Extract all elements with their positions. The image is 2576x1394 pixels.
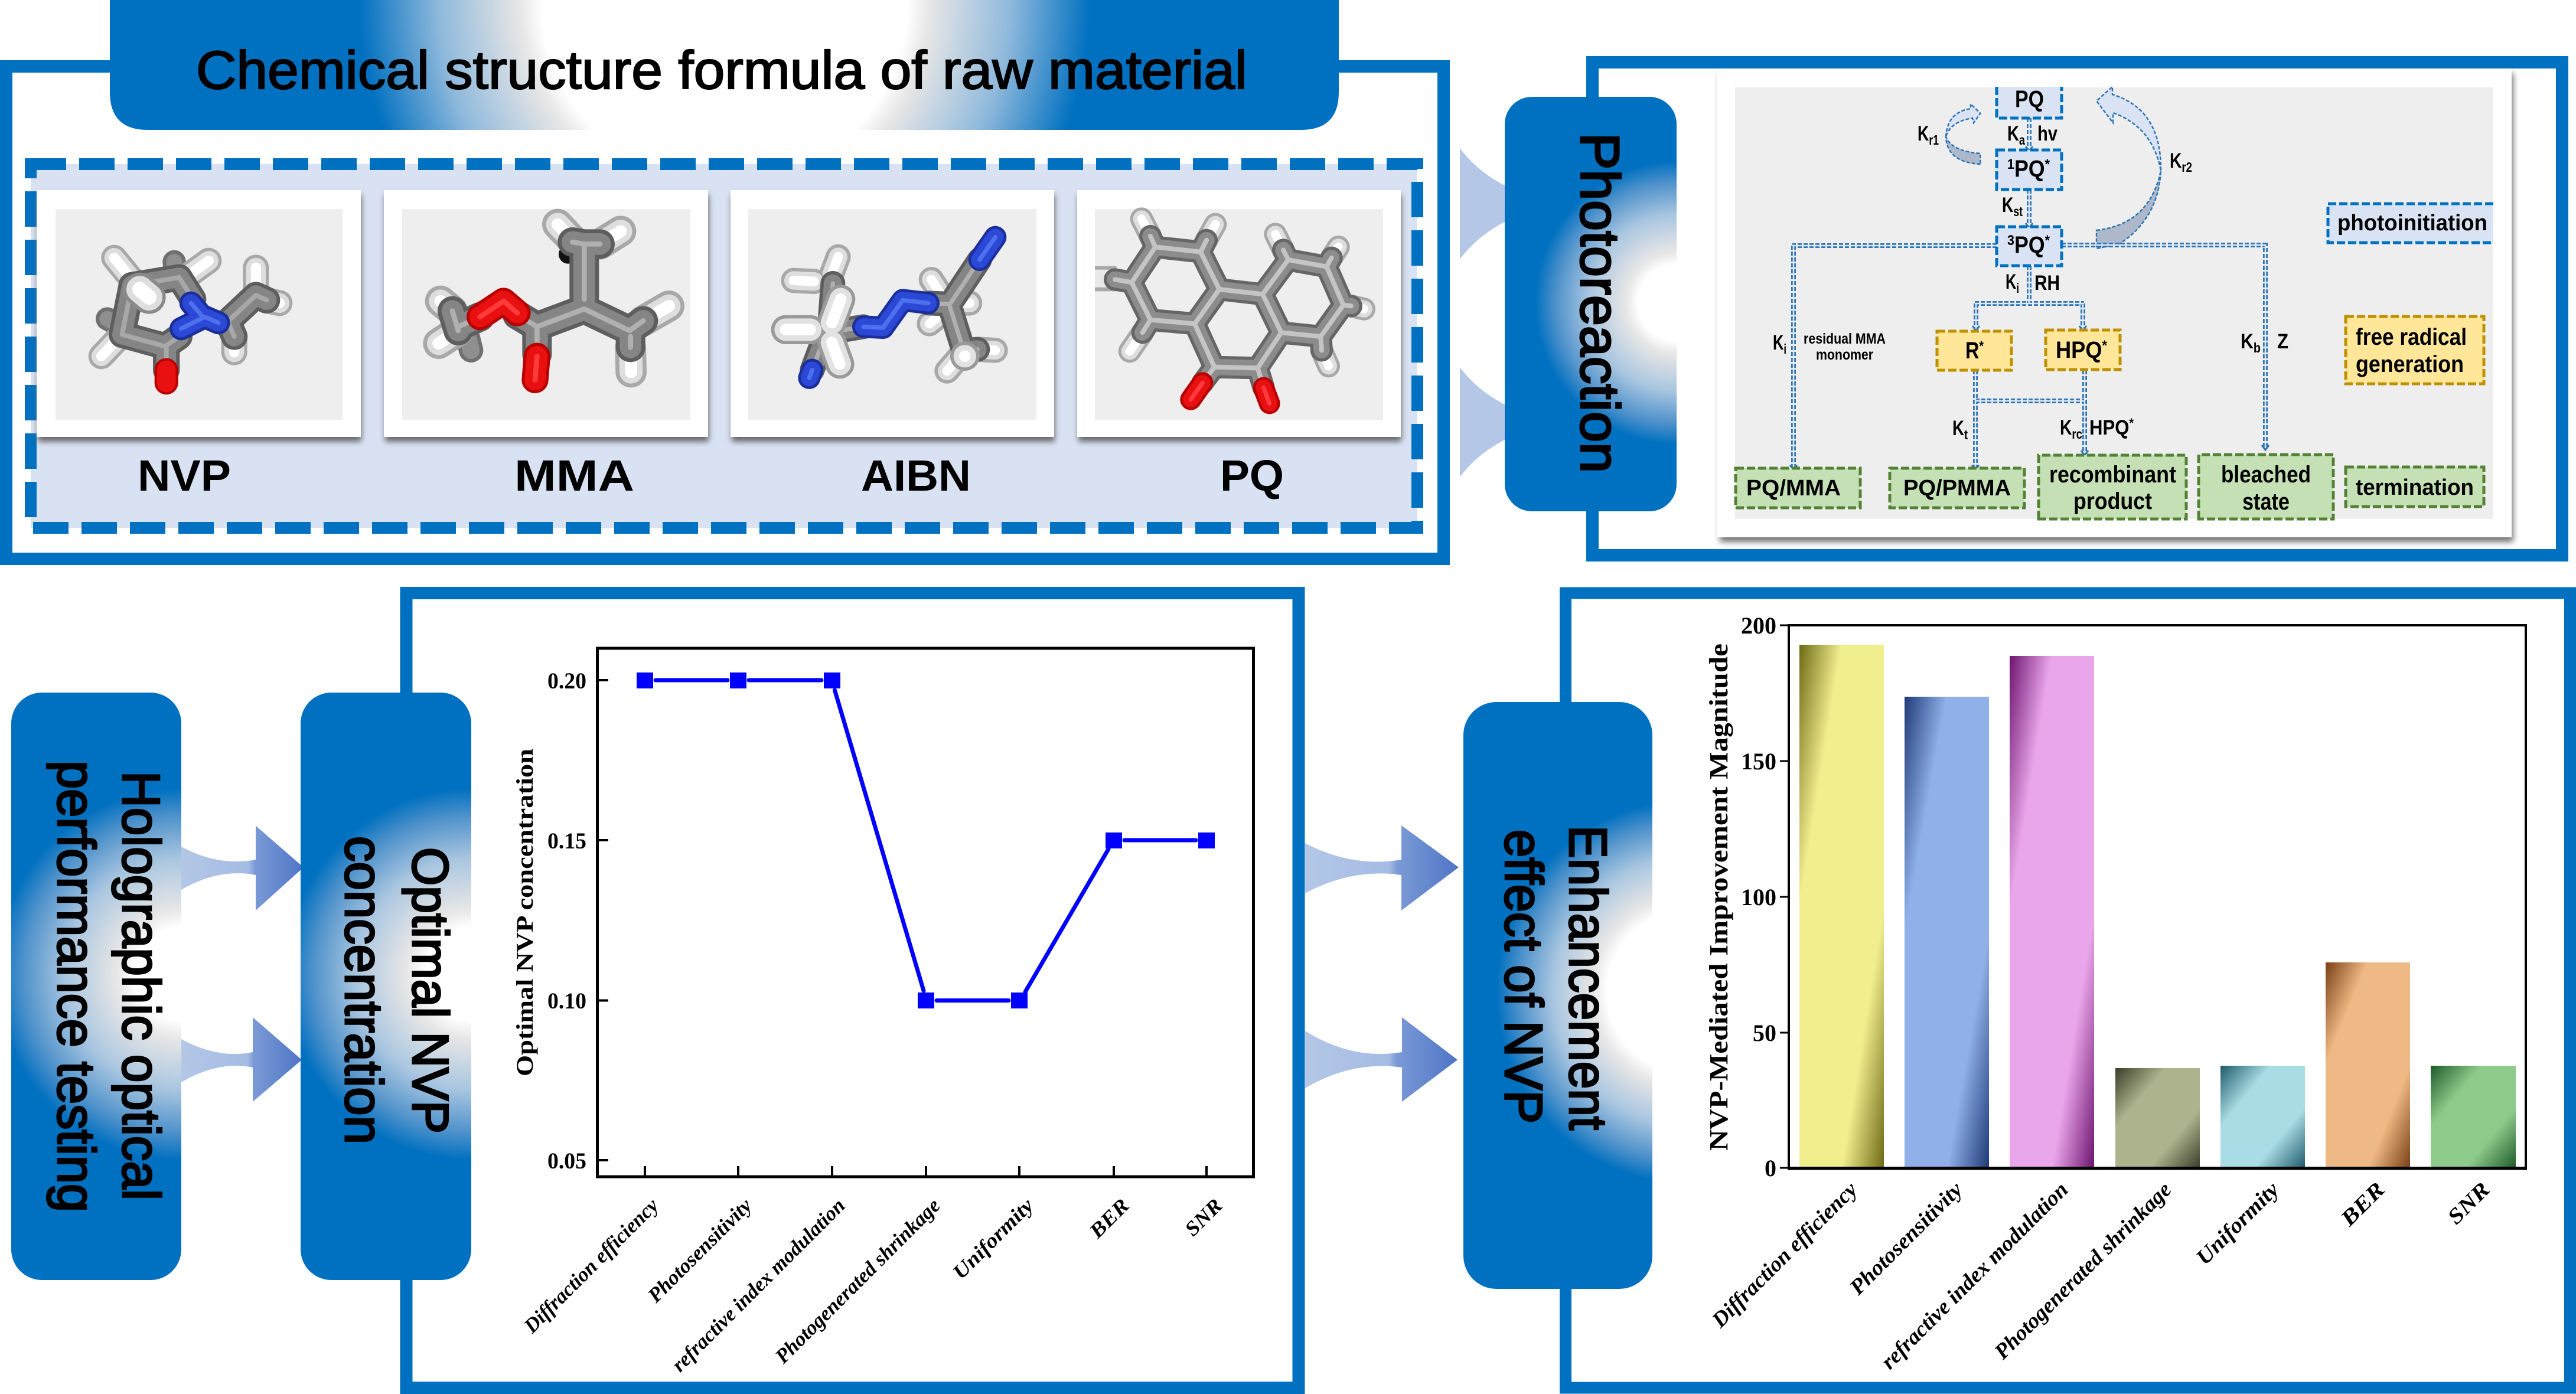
x category labels: Uniformity xyxy=(2192,1177,2284,1270)
y tick labels: 50 xyxy=(1753,1020,1776,1046)
arrow: raw materials to photoreaction (upper) xyxy=(1460,148,1512,259)
title: Chemical structure formula of raw material xyxy=(196,41,1247,100)
panel: chemical structure formula of raw material xyxy=(6,0,1443,559)
label: Ki left: K xyxy=(1773,331,1788,354)
label: Ki: i xyxy=(2016,280,2019,296)
node: PQ: PQ xyxy=(2015,86,2044,112)
y tick labels: 0.10 xyxy=(547,988,586,1014)
x category labels: SNR xyxy=(1180,1194,1227,1240)
x category labels: Diffraction efficiency xyxy=(519,1194,663,1338)
molecule card: PQ xyxy=(1077,190,1401,442)
node: PQ/MMA xyxy=(1736,468,1860,508)
node: PQ/PMMA xyxy=(1890,468,2024,508)
icon: MMA molecule xyxy=(439,224,669,380)
pill: Holographic optical performance testing xyxy=(11,693,181,1280)
molecule card: MMA xyxy=(384,190,709,442)
node: 1PQ*: 1 xyxy=(2007,156,2014,172)
label: Ki left: i xyxy=(1783,341,1786,357)
node: bleached state xyxy=(2199,455,2333,519)
axis ticks xyxy=(596,680,1207,1178)
legend: photoinitiation xyxy=(2328,204,2493,243)
x category labels: Uniformity xyxy=(948,1194,1038,1284)
node: bleached state: state xyxy=(2242,489,2290,515)
pill: Optimal NVP concentration xyxy=(301,693,471,1280)
y tick labels: 0.20 xyxy=(547,668,586,694)
panel: photoreaction diagram xyxy=(1592,63,2562,555)
molecule name: AIBN: AIBN xyxy=(861,451,971,500)
label: Kt: K xyxy=(1952,417,1967,440)
label: Kb: b xyxy=(2254,340,2261,355)
pill: Holographic optical performance testing: performance testing xyxy=(46,760,105,1212)
label: HPQ*: * xyxy=(2129,416,2134,430)
y ticks xyxy=(1780,625,1789,1168)
pill: Photoreaction: Photoreaction xyxy=(1569,133,1631,473)
bars xyxy=(1799,645,2516,1168)
arrow: chart to enhancement (upper) xyxy=(1305,825,1459,910)
diagram card xyxy=(1717,68,2513,542)
label: Kst: K xyxy=(2002,194,2017,217)
data markers xyxy=(637,672,1215,1008)
label: HPQ*: HPQ xyxy=(2089,416,2134,439)
y tick labels: 0.05 xyxy=(547,1148,586,1174)
arrow: Kr2 curved xyxy=(2096,87,2161,249)
x category labels xyxy=(519,1194,1227,1376)
axes frame xyxy=(1789,625,2526,1168)
node: 3PQ*: * xyxy=(2045,233,2050,249)
x category labels: Photosensitivity xyxy=(643,1194,757,1307)
panel: NVP enhancement bar chart xyxy=(1566,593,2570,1388)
x category labels: refractive index modulation xyxy=(1876,1177,2073,1374)
label: Kb: K xyxy=(2241,330,2255,353)
icon: AIBN molecule xyxy=(785,237,995,378)
node: PQ/MMA: PQ/MMA xyxy=(1746,476,1841,501)
molecule name: MMA: MMA xyxy=(514,451,634,500)
y axis title: Optimal NVP concentration xyxy=(511,749,538,1076)
legend: free radical generation: generation xyxy=(2356,351,2464,377)
pill: Optimal NVP concentration: Optimal NVP xyxy=(402,847,458,1134)
x category labels: Diffraction efficiency xyxy=(1707,1177,1863,1333)
node: recombinant product xyxy=(2039,455,2186,519)
node: PQ/PMMA: PQ/PMMA xyxy=(1903,476,2011,501)
legend: termination xyxy=(2346,467,2484,507)
panel border xyxy=(406,593,1299,1388)
panel: optimal NVP concentration chart xyxy=(406,593,1299,1388)
arrow: Kr1 curved xyxy=(1946,104,1981,164)
y tick labels: 200 xyxy=(1741,612,1776,639)
node: R* xyxy=(1937,331,2011,370)
node: 1PQ* xyxy=(1997,150,2062,190)
label: Ka: K xyxy=(2007,122,2022,145)
molecule card: AIBN xyxy=(731,190,1055,442)
legend: photoinitiation: photoinitiation xyxy=(2337,211,2487,236)
data line xyxy=(656,680,1196,1000)
label: Krc: rc xyxy=(2072,426,2082,442)
label: Kr1: K xyxy=(1918,122,1932,145)
panel border xyxy=(1592,63,2562,555)
arrow: raw materials to photoreaction (lower) xyxy=(1460,367,1512,477)
bar chart xyxy=(1704,612,2527,1374)
pill: Holographic optical performance testing: Holographic optical xyxy=(111,771,170,1200)
label: residual MMA monomer: monomer xyxy=(1816,347,1873,363)
node: recombinant product: recombinant xyxy=(2049,462,2176,488)
panel border xyxy=(6,66,1443,559)
y tick labels: 150 xyxy=(1741,748,1776,775)
molecule name: NVP: NVP xyxy=(138,451,231,500)
y tick labels xyxy=(547,668,586,1174)
x category labels: BER xyxy=(1084,1194,1134,1243)
pill: Enhancement effect of NVP: Enhancement xyxy=(1558,825,1617,1130)
label: Kr2: K xyxy=(2170,149,2184,172)
label: residual MMA monomer xyxy=(1804,331,1886,363)
label: Kst: st xyxy=(2013,204,2023,219)
x category labels xyxy=(1707,1177,2495,1374)
node: 3PQ* xyxy=(1997,227,2062,266)
label: residual MMA monomer: residual MMA xyxy=(1804,331,1886,347)
rate labels xyxy=(1773,122,2288,442)
x category labels: SNR xyxy=(2443,1177,2495,1229)
dashed group box xyxy=(31,164,1417,528)
y tick labels: 0.15 xyxy=(547,828,586,854)
axes frame xyxy=(598,648,1253,1177)
node: 1PQ*: PQ xyxy=(2014,156,2045,182)
y axis title: NVP-Mediated Improvement Magnitude xyxy=(1704,644,1733,1151)
x category labels: refractive index modulation xyxy=(667,1194,850,1376)
label: Z: Z xyxy=(2277,330,2288,353)
legend: free radical generation xyxy=(2346,316,2484,384)
arrow: chart to enhancement (lower) xyxy=(1305,1017,1457,1102)
x category labels: Photogenerated shrinkage xyxy=(770,1194,945,1369)
pill: Optimal NVP concentration: concentration xyxy=(334,836,393,1144)
legend: free radical generation: free radical xyxy=(2356,324,2467,350)
label: RH: RH xyxy=(2034,272,2060,295)
label: Krc: K xyxy=(2060,416,2075,439)
x category labels: Photosensitivity xyxy=(1844,1177,1968,1300)
x category labels: Photogenerated shrinkage xyxy=(1990,1177,2176,1364)
node: 3PQ*: 3 xyxy=(2007,233,2014,249)
label: Kr2: r2 xyxy=(2182,159,2192,175)
node: bleached state: bleached xyxy=(2221,462,2311,488)
node: HPQ*: HPQ xyxy=(2056,337,2107,363)
label: Ki: K xyxy=(2006,270,2020,293)
node: PQ xyxy=(1997,86,2062,118)
label: Ka: a xyxy=(2019,132,2025,148)
pill: Photoreaction xyxy=(1505,97,1677,511)
node: R*: * xyxy=(1979,338,1984,354)
y tick labels: 100 xyxy=(1741,884,1776,910)
arrow: holographic to optimal (upper) xyxy=(181,825,304,910)
icon: NVP molecule xyxy=(102,258,279,383)
connector lines xyxy=(1790,118,2269,470)
pill: Enhancement effect of NVP xyxy=(1463,702,1652,1289)
arrow: holographic to optimal (lower) xyxy=(181,1017,302,1102)
node: HPQ*: * xyxy=(2102,338,2108,354)
pill: Enhancement effect of NVP: effect of NVP xyxy=(1494,830,1553,1124)
node: 1PQ*: * xyxy=(2045,156,2050,172)
title banner xyxy=(110,0,1339,130)
node: HPQ* xyxy=(2046,330,2120,370)
icon: PQ molecule xyxy=(1095,219,1364,403)
y tick labels: 0 xyxy=(1765,1155,1776,1181)
molecule name: PQ: PQ xyxy=(1220,451,1284,500)
x category labels: BER xyxy=(2336,1177,2389,1232)
label: hv: hv xyxy=(2037,122,2057,145)
legend: termination: termination xyxy=(2356,475,2474,500)
label: Kr1: r1 xyxy=(1929,132,1939,148)
y tick labels xyxy=(1741,612,1776,1181)
label: Kt: t xyxy=(1964,427,1968,442)
node: recombinant product: product xyxy=(2073,488,2152,514)
node: 3PQ*: PQ xyxy=(2014,232,2045,258)
molecule card: NVP xyxy=(37,190,361,442)
line chart xyxy=(511,648,1253,1376)
node: R*: R xyxy=(1965,338,1982,364)
panel border xyxy=(1566,593,2570,1388)
